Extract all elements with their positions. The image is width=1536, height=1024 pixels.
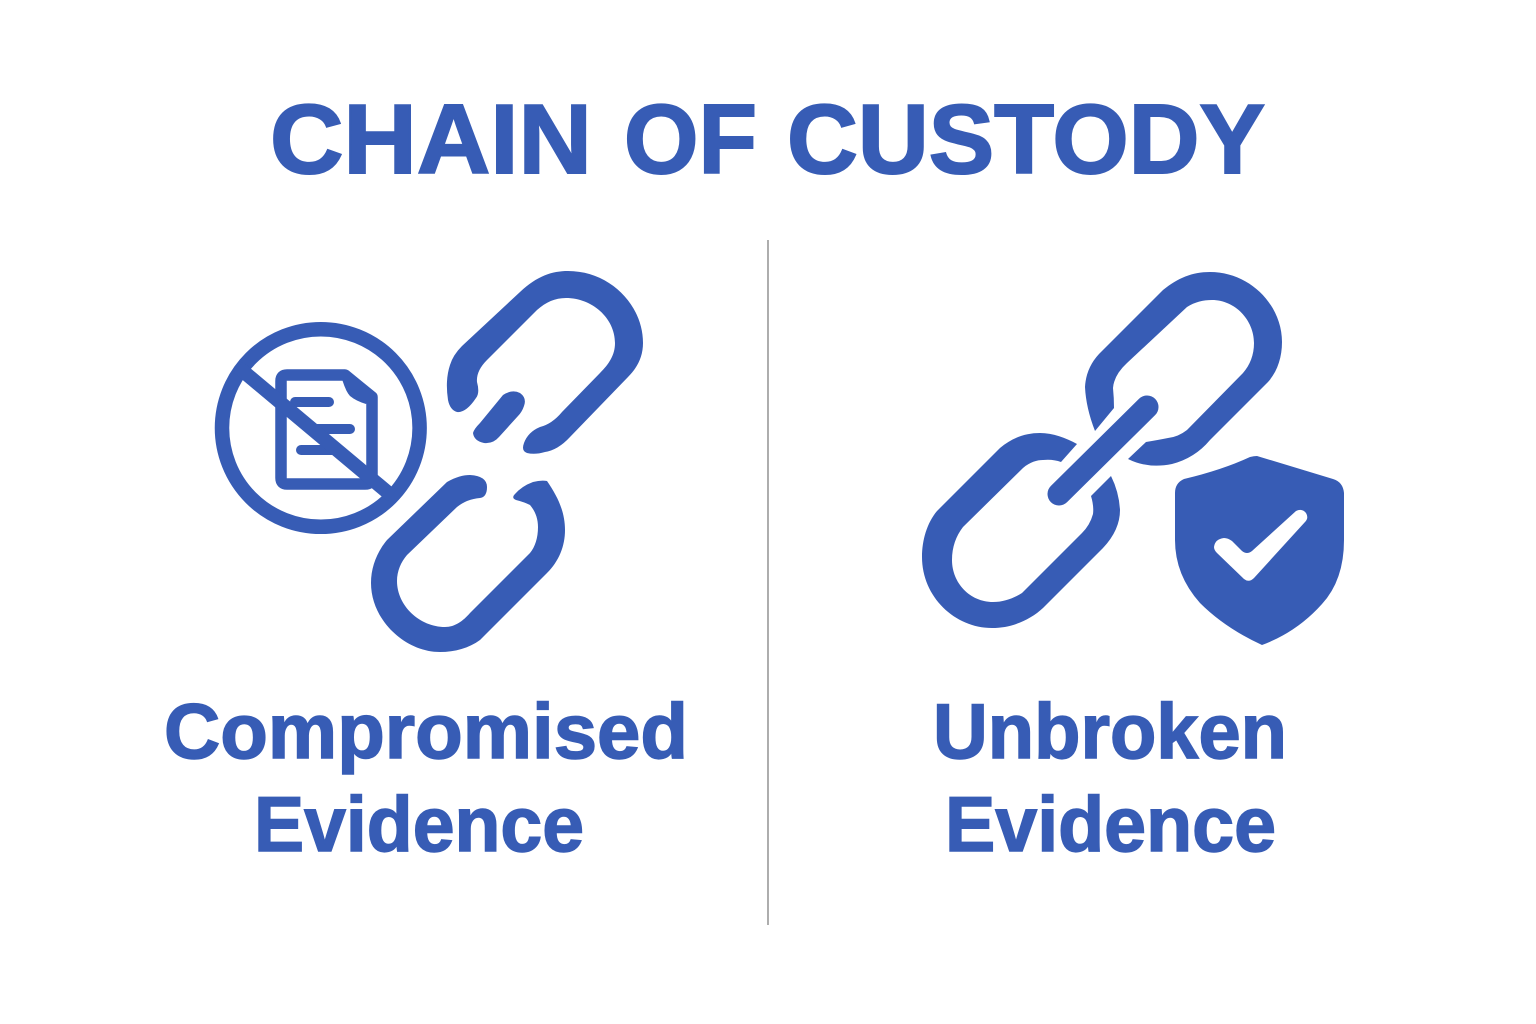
document outline	[281, 375, 372, 484]
title: CUSTODY	[787, 84, 1265, 194]
lower link	[922, 433, 1120, 628]
panel: compromised evidence	[164, 271, 688, 868]
title	[270, 84, 1265, 194]
icon: intact chain	[922, 272, 1282, 628]
panel: unbroken evidence	[922, 272, 1344, 868]
lower broken link	[371, 475, 565, 652]
title: OF	[624, 84, 757, 194]
label line: Evidence: Evidence	[254, 780, 584, 868]
center divider	[767, 240, 769, 925]
label: compromised evidence	[164, 687, 688, 868]
icon: broken chain	[371, 271, 643, 652]
document fold	[342, 376, 372, 404]
prohibition ring	[222, 329, 420, 527]
icon: no document symbol	[222, 329, 420, 527]
icon: shield with check mark	[1175, 456, 1344, 645]
label line: Compromised: Compromised	[164, 687, 688, 775]
label line: Unbroken: Unbroken	[933, 687, 1287, 775]
label: unbroken evidence	[933, 687, 1287, 868]
prohibition slash	[238, 367, 392, 496]
label line: Evidence: Evidence	[945, 780, 1276, 868]
document text lines	[295, 402, 350, 450]
broken link fragment	[473, 391, 525, 443]
shield	[1175, 456, 1344, 645]
title: CHAIN	[270, 84, 592, 194]
upper broken link	[447, 271, 643, 454]
upper link	[1085, 272, 1282, 466]
center link bar	[1059, 407, 1147, 494]
check mark	[1214, 510, 1307, 581]
